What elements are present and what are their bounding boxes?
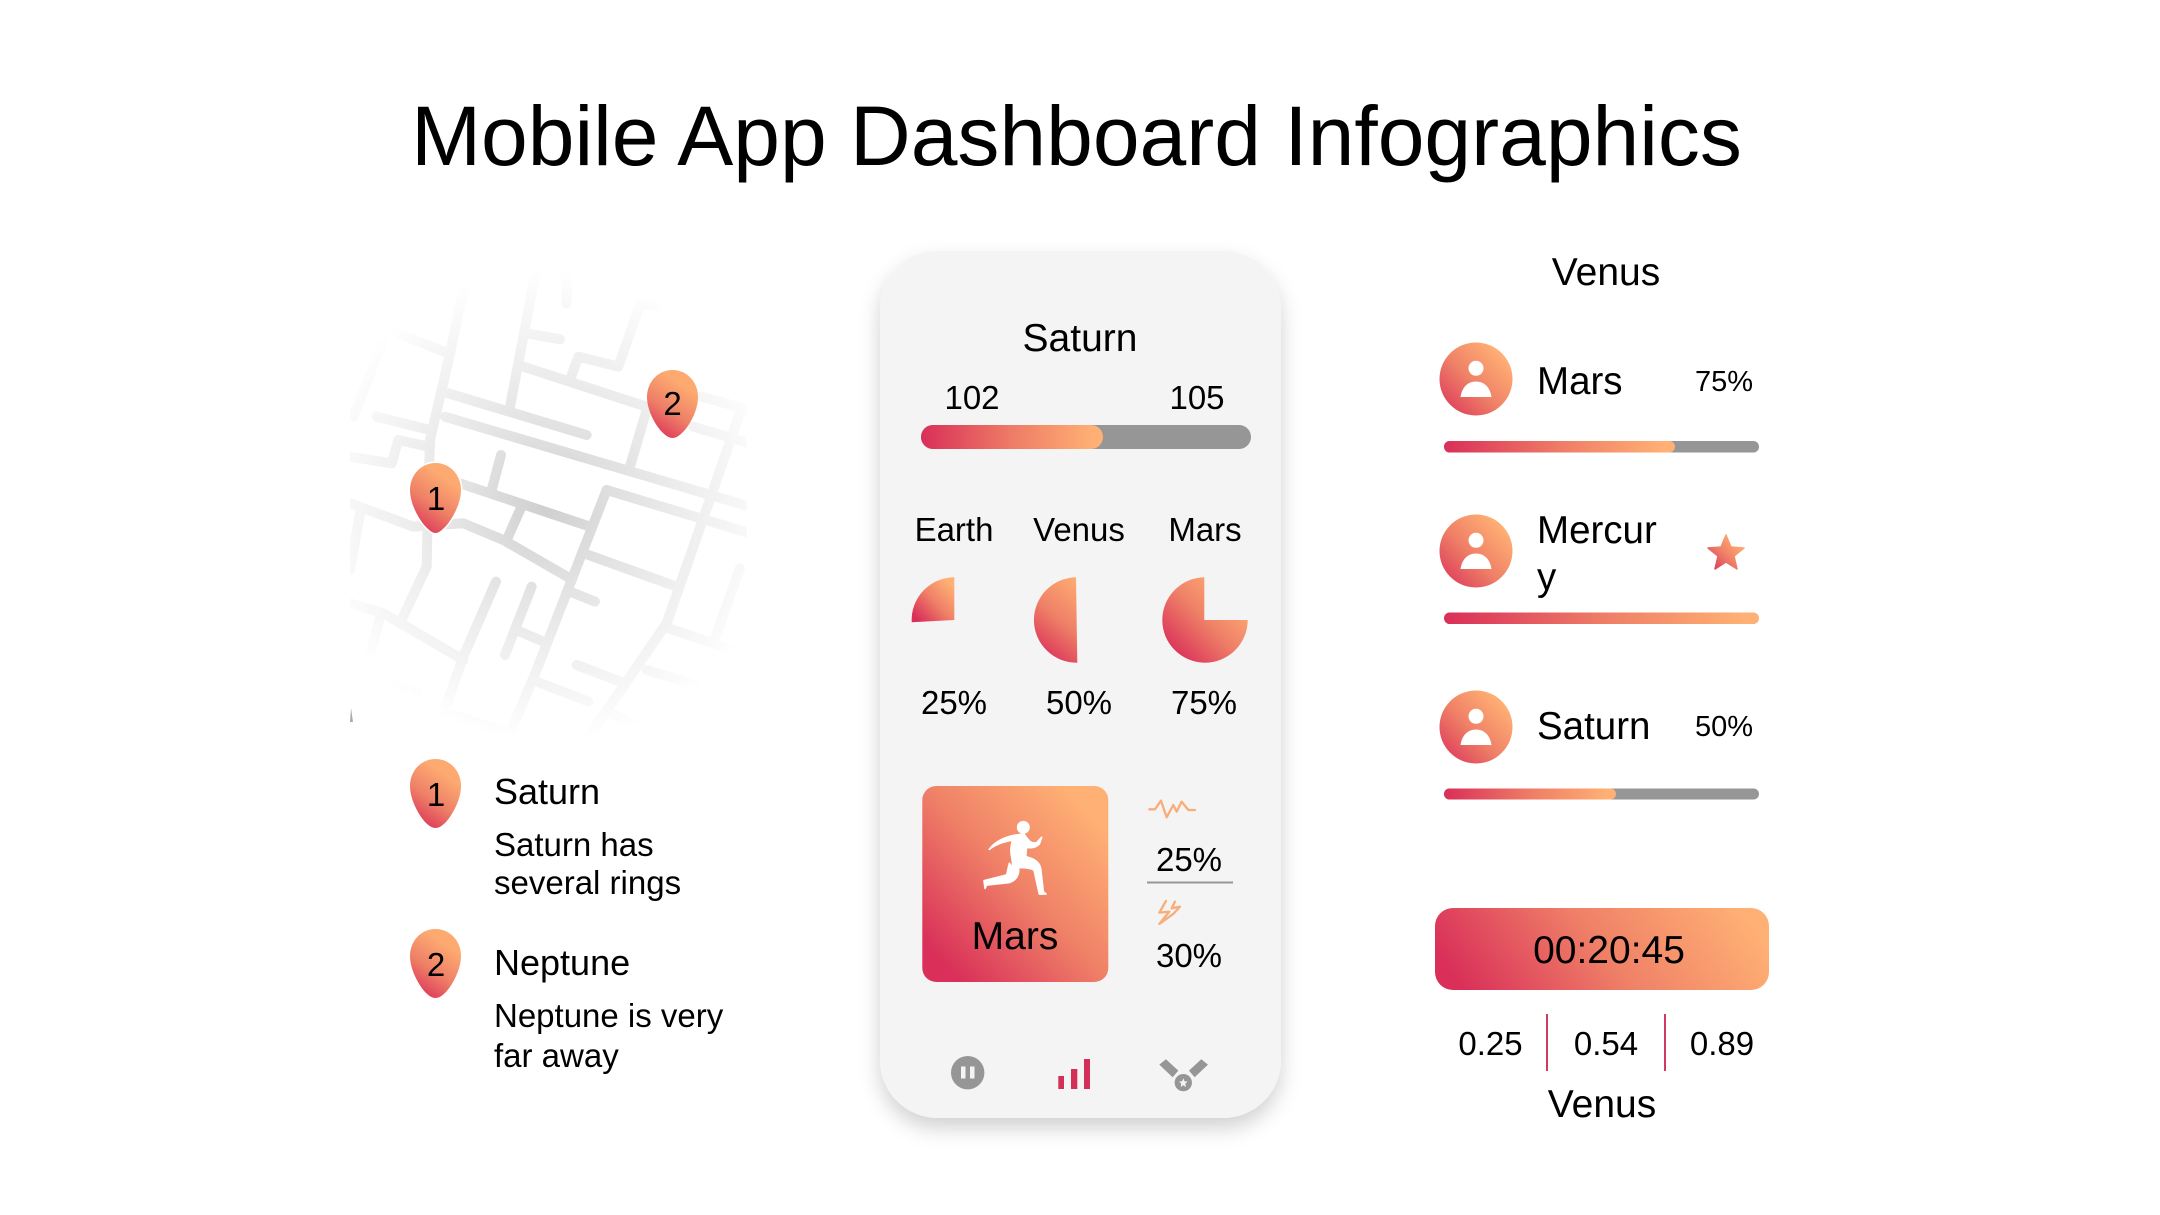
row: Mercury: y: [1537, 556, 1557, 599]
map sliver: [350, 708, 353, 722]
timer stats: [1458, 1014, 1754, 1071]
pie labels: Venus: [1033, 511, 1125, 548]
legend: [410, 759, 724, 1074]
phone body: [880, 251, 1281, 1118]
pie values: 50%: [1046, 684, 1112, 721]
icon: bar chart: [1058, 1059, 1090, 1089]
range labels: 102: [944, 379, 1000, 416]
right panel: [1435, 251, 1769, 1126]
stat: 25%: 25%: [1156, 841, 1222, 878]
legend item 1: several rings: [494, 864, 681, 901]
timer: [1435, 908, 1769, 990]
caption: Venus: Venus: [1548, 1083, 1656, 1126]
title: Mobile App Dashboard Infographics: [411, 89, 1742, 183]
map pin 1: 1: [427, 480, 445, 517]
map pin 1: [410, 463, 461, 533]
legend item 2: Neptune is very: [494, 997, 724, 1034]
row: Mars: [1440, 342, 1759, 452]
timer stats: 0.25: [1458, 1025, 1523, 1062]
row: Mercury: Mercur: [1537, 509, 1657, 552]
range labels: [944, 379, 1225, 416]
row: Mars: 75%: [1695, 366, 1753, 398]
map panel: [350, 312, 742, 722]
row: Saturn: 50%: [1695, 711, 1753, 743]
timer stats: 0.89: [1690, 1025, 1754, 1062]
legend item 2: [410, 929, 724, 1074]
street map: [352, 312, 742, 700]
legend item 1: Saturn: [494, 771, 600, 812]
legend item 1: 1: [427, 776, 445, 813]
pie labels: Earth: [915, 511, 993, 548]
pie: Mars 75%: [1162, 577, 1248, 663]
heading: Venus: Venus: [1552, 251, 1660, 294]
pie labels: [915, 511, 1242, 548]
map pin 2: [647, 370, 698, 438]
icon: runner: [984, 822, 1046, 894]
row: Saturn: [1440, 690, 1759, 800]
pie: Earth 25%: [912, 577, 954, 622]
row: Mercury: [1440, 509, 1759, 624]
pie values: 75%: [1171, 684, 1237, 721]
legend item 1: [410, 759, 681, 901]
pie values: [921, 684, 1237, 721]
icon: medal: [1159, 1059, 1208, 1091]
phone panel: [880, 251, 1281, 1118]
pie: Venus 50%: [1034, 577, 1077, 663]
phone heading: Saturn: [1023, 317, 1137, 360]
legend item 2: far away: [494, 1037, 619, 1074]
Mars activity card: [922, 786, 1108, 982]
stat: 30%: 30%: [1156, 937, 1222, 974]
icon: lightning: [1159, 901, 1180, 924]
Mars activity card: Mars: [972, 915, 1058, 958]
legend item 2: Neptune: [494, 942, 630, 983]
timer: 00:20:45: [1533, 929, 1685, 972]
row: Mars: Mars: [1537, 360, 1623, 403]
row: Saturn: Saturn: [1537, 705, 1650, 748]
progress bar: [921, 425, 1251, 449]
map pin 2: 2: [663, 385, 682, 422]
pie labels: Mars: [1168, 511, 1242, 548]
timer stats: 0.54: [1574, 1025, 1638, 1062]
icon: pause: [951, 1056, 984, 1089]
pie values: 25%: [921, 684, 987, 721]
legend item 2: 2: [427, 946, 445, 983]
divider: [1147, 882, 1233, 884]
icon: heartbeat: [1149, 801, 1195, 817]
legend item 1: Saturn has: [494, 826, 654, 863]
range labels: 105: [1169, 379, 1225, 416]
